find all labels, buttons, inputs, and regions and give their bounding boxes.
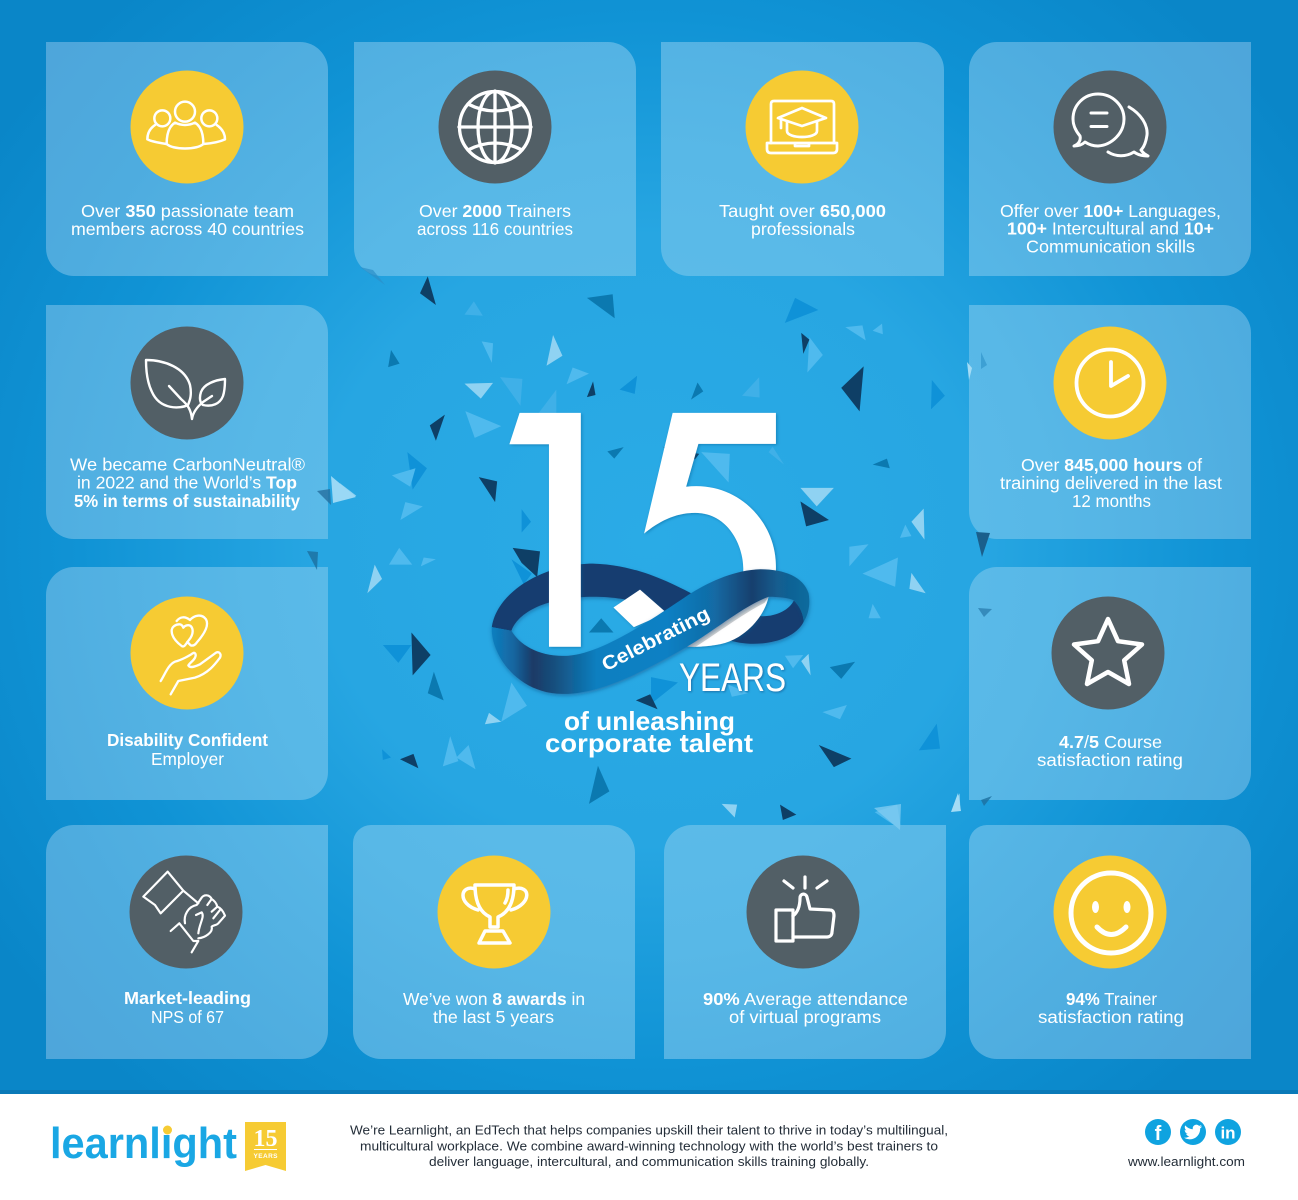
confetti overlapping panels — [307, 267, 992, 830]
text: sustainability — [70, 454, 305, 511]
footer band — [0, 1090, 1298, 1094]
icon: linkedin: in — [1220, 1124, 1236, 1142]
logo: learnlight wordmark: learnlight — [50, 1119, 237, 1168]
icon: speech bubbles — [1073, 94, 1148, 156]
text: of unleashing corporate talent: of unleashing — [564, 706, 735, 736]
icon: clock — [1076, 350, 1144, 416]
text: awards: We’ve won 8 awards in — [403, 989, 585, 1009]
text: disability confident — [107, 730, 268, 769]
icon: smiley — [1071, 873, 1151, 953]
icon circle: disability confident — [130, 596, 244, 710]
text: sustainability: 5% in terms of sustainability — [74, 491, 300, 511]
text: course satisfaction — [1037, 732, 1183, 770]
text: training hours — [1000, 455, 1222, 511]
icon: twitter — [1180, 1119, 1206, 1145]
text: trainer satisfaction: 94% Trainer — [1066, 989, 1157, 1009]
logo: 15 years ribbon: YEARS — [254, 1153, 278, 1160]
card — [661, 42, 944, 276]
text: company description: We’re Learnlight, an EdTech that helps companies upskill their talent to thrive in today’s multilingual, — [350, 1122, 948, 1138]
text: awards — [403, 989, 585, 1027]
icon: flag in fist — [143, 872, 225, 952]
icon circle: attendance — [746, 856, 860, 968]
icon circle: trainer satisfaction — [1054, 856, 1166, 968]
numeral 1 and 5 — [509, 413, 776, 647]
icon: hand and hearts — [161, 616, 221, 694]
panel: course satisfaction — [969, 567, 1251, 800]
text: NPS: NPS of 67 — [151, 1007, 224, 1027]
logo: 15 years ribbon — [245, 1122, 286, 1171]
text: company description: multicultural workplace. We combine award-winning technology with the world’s best trainers to — [360, 1138, 938, 1154]
text: website: www.learnlight.com — [1127, 1154, 1245, 1169]
text: languages: Offer over 100+ Languages, — [1000, 201, 1221, 221]
text: trainer satisfaction: satisfaction rating — [1038, 1007, 1184, 1027]
icon: leaves — [146, 360, 225, 419]
icon: linkedin — [1215, 1119, 1241, 1145]
panel: trainers — [354, 42, 636, 276]
text: disability confident: Employer — [151, 749, 224, 769]
icon circle: awards — [438, 856, 550, 968]
panel: awards — [353, 825, 635, 1059]
15 anniversary emblem — [492, 413, 809, 758]
text: course satisfaction: 4.7/5 Course — [1059, 732, 1162, 752]
text: disability confident: Disability Confident — [107, 730, 268, 750]
text: attendance: of virtual programs — [729, 1007, 881, 1027]
card — [46, 825, 328, 1059]
panel: languages — [969, 42, 1251, 276]
logo: 15 years ribbon: 15 — [254, 1126, 278, 1152]
text: trainers: across 116 countries — [417, 219, 573, 239]
text: years: YEARS — [679, 656, 786, 700]
text: of unleashing corporate talent — [545, 706, 753, 758]
icon circle: trainers — [438, 70, 552, 184]
panel: NPS — [46, 825, 328, 1059]
text: trainers — [417, 201, 573, 239]
card — [46, 305, 328, 539]
text: trainer satisfaction — [1038, 989, 1184, 1027]
confetti triangles — [340, 276, 960, 830]
card — [46, 567, 328, 800]
text: professionals: professionals — [751, 219, 855, 239]
text: course satisfaction: satisfaction rating — [1037, 750, 1183, 770]
icon: facebook — [1145, 1119, 1171, 1145]
text: NPS — [124, 988, 251, 1027]
text: training hours: 12 months — [1072, 491, 1151, 511]
footer background — [0, 1094, 1298, 1200]
card — [969, 567, 1251, 800]
icon: trophy — [463, 885, 527, 943]
panel: team members — [46, 42, 328, 276]
icon circle: NPS — [130, 856, 242, 968]
card — [969, 42, 1251, 276]
card — [46, 42, 328, 276]
panel: sustainability — [46, 305, 328, 539]
text: company description: deliver language, intercultural, and communication skills training globally. — [429, 1154, 869, 1169]
text: team — [71, 201, 304, 239]
panel: professionals — [661, 42, 944, 276]
text: languages: Communication skills — [1026, 236, 1195, 256]
icon: laptop with mortarboard — [767, 101, 837, 153]
text: professionals — [719, 201, 886, 239]
icon circle: languages — [1054, 70, 1166, 184]
icon: facebook: f — [1155, 1123, 1162, 1145]
footer — [0, 1090, 1298, 1200]
text: awards: the last 5 years — [433, 1007, 554, 1027]
text: NPS: Market-leading — [124, 988, 251, 1008]
card — [969, 825, 1251, 1059]
ribbon: front band — [492, 569, 809, 694]
icon: people — [147, 102, 225, 148]
panel: attendance — [664, 825, 946, 1059]
text: attendance: 90% Average attendance — [703, 989, 908, 1009]
icon circle: sustainability — [130, 326, 244, 440]
text: sustainability: in 2022 and the World’s Top — [77, 472, 297, 492]
card — [664, 825, 946, 1059]
panel: disability confident — [46, 567, 328, 800]
text: training hours: Over 845,000 hours of — [1021, 455, 1202, 475]
text: languages: 100+ Intercultural and 10+ — [1007, 218, 1214, 238]
icon circle: team — [130, 70, 244, 184]
text: team: members across 40 countries — [71, 219, 304, 239]
panel: training hours — [969, 305, 1251, 539]
text: sustainability: We became CarbonNeutral® — [70, 454, 305, 474]
icon circle: course satisfaction — [1052, 596, 1164, 710]
text: attendance — [703, 989, 908, 1027]
text: training hours: training delivered in the last — [1000, 473, 1222, 493]
text: professionals: Taught over 650,000 — [719, 201, 886, 221]
text: languages — [1000, 201, 1221, 256]
icon: thumbs up — [776, 877, 834, 941]
panel: trainer satisfaction — [969, 825, 1251, 1059]
text: of unleashing corporate talent: corporate talent — [545, 728, 753, 758]
ribbon: back loop — [492, 564, 804, 644]
icon circle: training hours — [1054, 326, 1166, 440]
icon circle: professionals — [746, 70, 858, 184]
card — [969, 305, 1251, 539]
card — [354, 42, 636, 276]
text: trainers: Over 2000 Trainers — [419, 201, 571, 221]
card — [353, 825, 635, 1059]
text: team: Over 350 passionate team — [81, 201, 294, 221]
text: company description — [350, 1122, 948, 1169]
icon: globe — [459, 91, 531, 163]
text: celebrating: Celebrating — [598, 603, 713, 676]
icon: star — [1074, 619, 1142, 684]
